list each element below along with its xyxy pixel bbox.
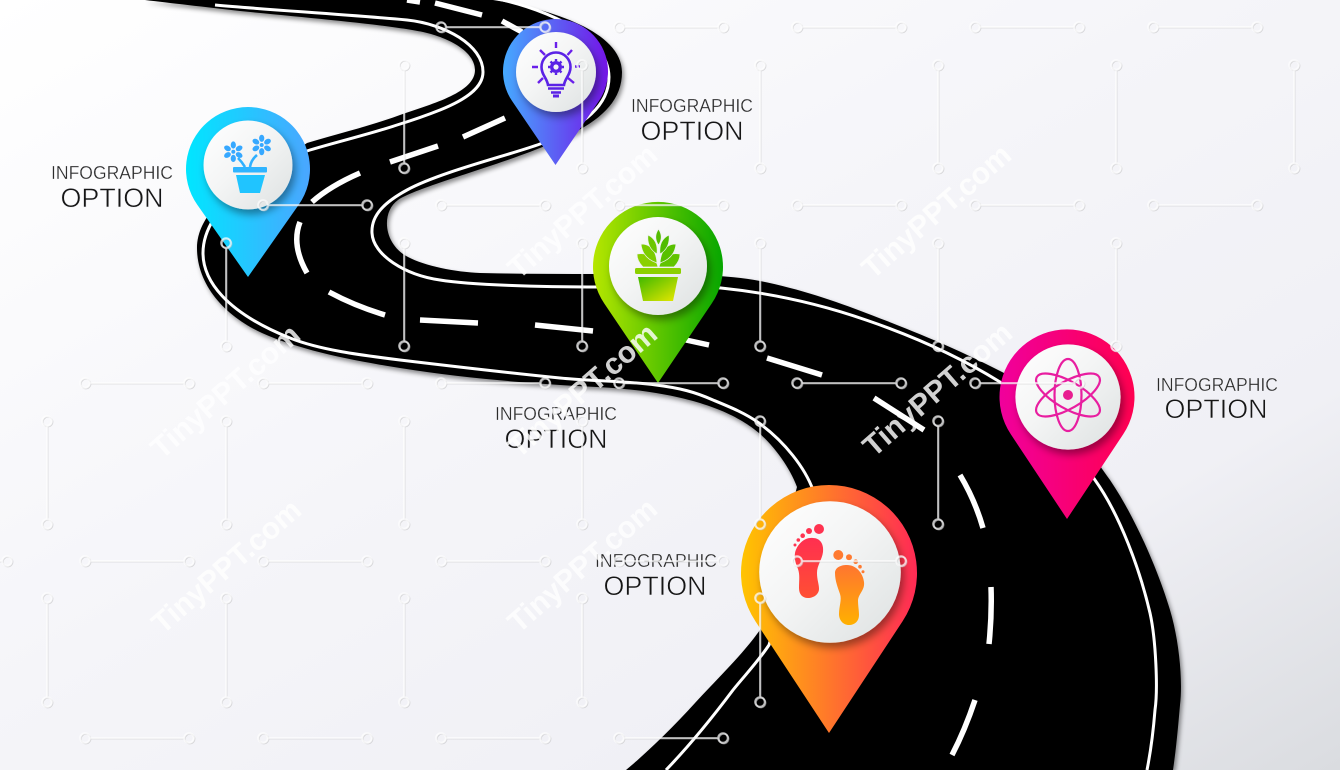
road edge line: lower left [203,5,813,770]
left foot [794,524,824,598]
label: option middle: OPTION [504,424,608,454]
watermarks: TinyPPT.com [145,318,307,465]
icon: bulb with gear [532,42,580,96]
icon: footprints [794,524,864,625]
pin body [741,485,917,733]
pin: footprints (orange) [741,485,917,733]
label: option right [1156,375,1278,424]
right flower [251,135,272,155]
pin body [593,202,723,383]
icon: atom [1030,359,1106,431]
label: option middle [495,404,617,454]
icon disc [1015,344,1121,450]
watermarks: TinyPPT.com [502,317,664,464]
road surface [145,0,1181,770]
icon disc [516,32,596,112]
winding road [145,0,1181,770]
watermarks: TinyPPT.com [502,492,664,639]
label: option top-centre: OPTION [640,116,744,146]
label: option lower [595,551,717,601]
label: option top-centre: INFOGRAPHIC [631,96,753,116]
label: option lower: INFOGRAPHIC [595,551,717,571]
leaves [637,229,680,267]
watermarks: TinyPPT.com [146,493,308,640]
pin body [1000,329,1134,519]
left flower [223,141,244,162]
road edge line: upper right [372,0,1156,770]
label: option right: OPTION [1164,394,1268,424]
icon disc [609,217,707,315]
icon: flowers in pot [223,135,272,193]
label: option top-left: OPTION [60,183,164,213]
watermarks: TinyPPT.com [856,138,1018,285]
road centre dashes [297,0,991,755]
icon: succulent in pot [635,229,681,301]
watermarks [145,138,1019,640]
pin: light bulb (purple) [503,19,608,165]
pot [635,268,681,274]
pin body [503,19,608,165]
right foot [833,550,864,625]
icon disc [759,501,901,643]
label: option top-left [51,163,173,213]
pin: atom (pink) [1000,329,1134,519]
icon disc [204,120,292,210]
pin body [186,107,310,277]
watermarks: TinyPPT.com [857,316,1019,463]
watermarks: TinyPPT.com [502,138,664,285]
label: option top-centre [631,96,753,146]
label: option lower: OPTION [604,571,706,601]
pin: potted plant (green) [593,202,723,383]
label: option right: INFOGRAPHIC [1156,375,1278,395]
label: option top-left: INFOGRAPHIC [51,163,173,183]
pin: flower (blue) [186,107,310,277]
label: option middle: INFOGRAPHIC [495,404,617,424]
